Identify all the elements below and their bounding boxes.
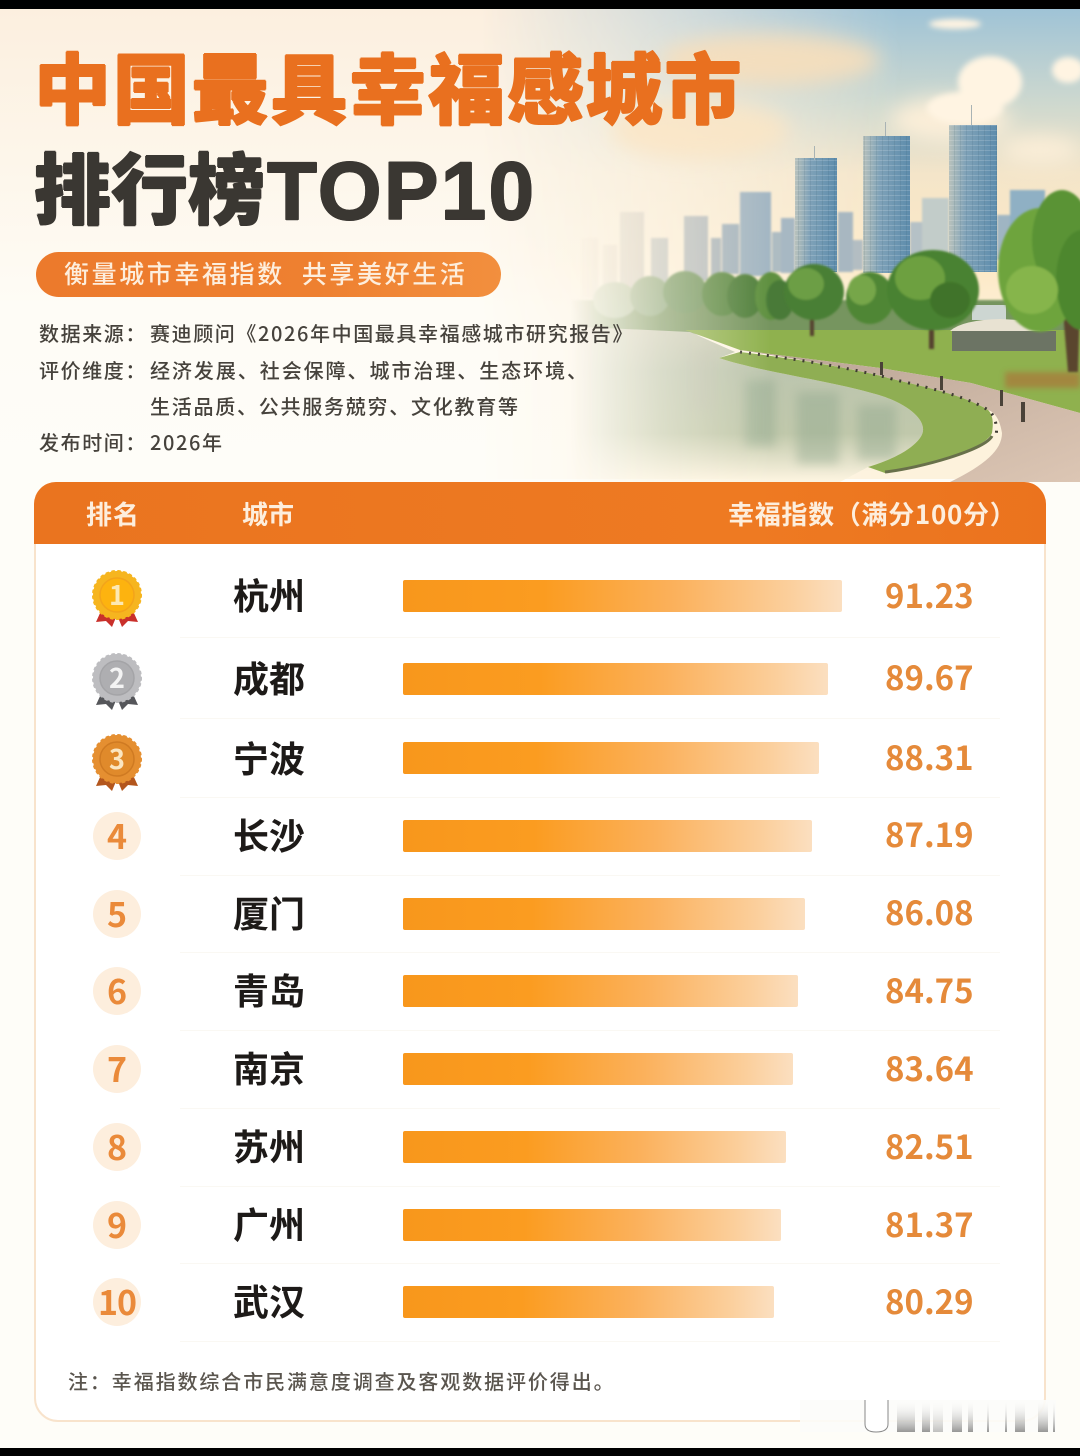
main towers xyxy=(795,105,997,273)
footnote: 注：幸福指数综合市民满意度调查及客观数据评价得出。 xyxy=(68,1366,616,1395)
lake xyxy=(586,328,923,482)
row 2: silver medal xyxy=(92,653,142,710)
row 4: city: 长沙 xyxy=(233,808,305,860)
row 3: bronze medal xyxy=(92,734,142,791)
row 10: city: 武汉 xyxy=(233,1274,305,1326)
row 3: bronze medal: 3 xyxy=(109,738,125,777)
row 1: city: 杭州 xyxy=(233,568,305,620)
header: index: 幸福指数（满分100分） xyxy=(728,495,1016,532)
row 7: value: 83.64 xyxy=(885,1043,974,1091)
row 9: rank: 9 xyxy=(107,1199,127,1248)
lawn xyxy=(685,330,1080,413)
text: 生活品质、公共服务兢穷、文化教育等 xyxy=(150,391,520,420)
row 10: rank: 10 xyxy=(98,1276,136,1325)
title line 1: 中国最具幸福感城市 xyxy=(34,30,743,141)
row 3: value: 88.31 xyxy=(885,732,974,780)
text: 经济发展、社会保障、城市治理、生态环境、 xyxy=(150,355,589,384)
row 9: value: 81.37 xyxy=(885,1199,974,1247)
row 7: city: 南京 xyxy=(233,1041,305,1093)
metadata: release date xyxy=(39,427,224,456)
metadata: data source: 数据来源： xyxy=(39,318,147,347)
fence xyxy=(740,352,997,436)
riverside grass xyxy=(719,352,993,473)
table header xyxy=(34,482,1046,544)
row 5: bar xyxy=(403,898,805,930)
distant towers xyxy=(620,188,1046,287)
row 9: rank xyxy=(93,1201,141,1249)
foreground tree xyxy=(998,190,1080,372)
row separators xyxy=(180,637,1000,638)
subtitle pill: 衡量城市幸福指数 共享美好生活 xyxy=(64,255,467,291)
row 3: city: 宁波 xyxy=(233,731,305,783)
row 5: rank: 5 xyxy=(107,888,127,937)
row 4: rank: 4 xyxy=(107,810,127,859)
metadata: evaluation dimensions xyxy=(39,355,589,420)
row 4: value: 87.19 xyxy=(885,809,974,857)
row 2: city: 成都 xyxy=(233,651,305,703)
metadata: release date: 发布时间： xyxy=(39,427,147,456)
row 2: bar xyxy=(403,663,828,695)
row 9: bar xyxy=(403,1209,781,1241)
skyline, trees, lake and park xyxy=(540,105,1080,482)
metadata: evaluation dimensions: 评价维度： xyxy=(39,355,147,384)
row 5: rank xyxy=(93,890,141,938)
clouds xyxy=(610,19,1080,164)
row 2: value: 89.67 xyxy=(885,652,974,700)
sky xyxy=(520,9,1080,479)
row 10: value: 80.29 xyxy=(885,1276,974,1324)
text: 2026年 xyxy=(150,427,224,456)
row 6: value: 84.75 xyxy=(885,965,974,1013)
header: rank: 排名 xyxy=(86,495,140,532)
row 7: bar xyxy=(403,1053,793,1085)
metadata: data source xyxy=(39,318,634,347)
row 1: gold medal xyxy=(92,570,142,627)
row 8: value: 82.51 xyxy=(885,1121,974,1169)
row 6: rank xyxy=(93,967,141,1015)
ranking table panel xyxy=(34,482,1046,1422)
pavilion xyxy=(950,305,1056,351)
row 2: silver medal: 2 xyxy=(109,657,125,696)
row 4: rank xyxy=(93,812,141,860)
row 1: gold medal: 1 xyxy=(109,574,125,613)
distant tree line xyxy=(560,271,1080,334)
row 1: bar xyxy=(403,580,842,612)
row 8: bar xyxy=(403,1131,786,1163)
row 7: rank: 7 xyxy=(107,1043,127,1092)
walkway xyxy=(740,350,1080,482)
title line 2: 排行榜TOP10 xyxy=(34,130,536,241)
row 6: city: 青岛 xyxy=(233,963,305,1015)
row 5: value: 86.08 xyxy=(885,887,974,935)
row 1: value: 91.23 xyxy=(885,570,974,618)
row 3: bar xyxy=(403,742,819,774)
water reflections xyxy=(744,378,899,468)
row 6: bar xyxy=(403,975,798,1007)
row 8: city: 苏州 xyxy=(233,1119,305,1171)
row 5: city: 厦门 xyxy=(233,886,305,938)
row 6: rank: 6 xyxy=(107,965,127,1014)
row 8: rank: 8 xyxy=(107,1121,127,1170)
row 10: bar xyxy=(403,1286,774,1318)
text: 赛迪顾问《2026年中国最具幸福感城市研究报告》 xyxy=(150,318,634,347)
park trees xyxy=(784,250,979,349)
row 9: city: 广州 xyxy=(233,1197,305,1249)
row 8: rank xyxy=(93,1123,141,1171)
row 7: rank xyxy=(93,1045,141,1093)
watermark smear xyxy=(800,1400,1055,1432)
people on path xyxy=(880,362,1025,422)
header: city: 城市 xyxy=(242,495,294,532)
subtitle pill xyxy=(36,252,501,297)
hero illustration: city skyline by a lake xyxy=(520,9,1080,482)
row 4: bar xyxy=(403,820,812,852)
